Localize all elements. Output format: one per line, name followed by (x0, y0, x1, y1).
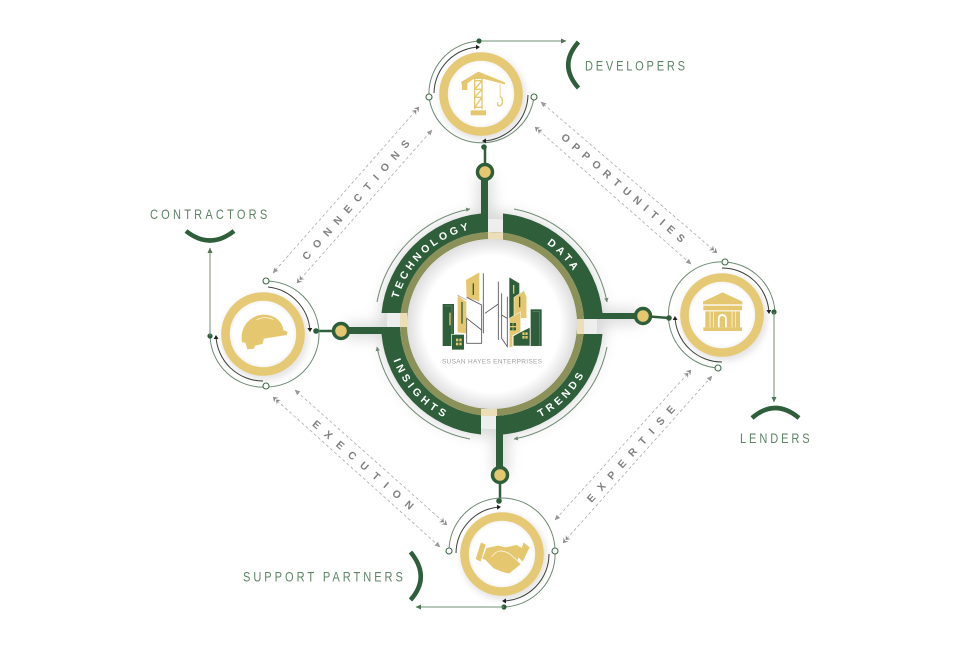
satellite: support partners (446, 498, 558, 610)
gold ring (684, 278, 760, 352)
callout: support partners (243, 552, 504, 607)
satellite: contractors (207, 278, 319, 389)
thin arcs with arrows (377, 209, 607, 439)
logo: Susan Hayes Enterprises (442, 272, 543, 366)
callout: developers: DEVELOPERS (585, 58, 685, 74)
callout: contractors: CONTRACTORS (150, 207, 267, 222)
white centre disc (407, 239, 577, 409)
quadrant: technology (382, 180, 488, 313)
quadrant: insights: INSIGHTS (394, 358, 446, 416)
gold ring (444, 56, 518, 132)
callout: developers (481, 41, 685, 88)
callout: lenders (740, 312, 810, 446)
callout: lenders: LENDERS (740, 431, 810, 446)
dashed link: expertise: EXPERTISE (585, 404, 678, 505)
icon: crane (461, 72, 505, 115)
callout: contractors (150, 207, 267, 336)
dashed link: execution (273, 390, 447, 547)
quadrant: trends: TRENDS (536, 372, 583, 416)
icon: bank (703, 292, 742, 331)
dashed link: execution: EXECUTION (310, 418, 416, 513)
connector: top (478, 147, 492, 180)
dashed link: connections (273, 107, 432, 283)
connector: right (636, 308, 669, 324)
dashed link: expertise (555, 370, 712, 543)
dashed link: opportunities (535, 102, 717, 264)
logo: Susan Hayes Enterprises: SUSAN HAYES ENTERPRISES (442, 358, 543, 366)
dashed link: opportunities: OPPORTUNITIES (558, 131, 687, 245)
icon: handshake (476, 542, 530, 574)
quadrant: data: DATA (547, 238, 578, 270)
hub shadow (345, 176, 640, 475)
quadrant: trends (496, 334, 602, 467)
olive ring (404, 236, 580, 412)
quadrant: insights (349, 327, 481, 434)
dashed link: connections: CONNECTIONS (300, 138, 413, 263)
pale ring segments (400, 232, 584, 416)
gold ring (464, 516, 540, 592)
quadrant: technology: TECHNOLOGY (391, 222, 467, 297)
gold ring (226, 296, 300, 372)
connector: bottom (492, 468, 508, 501)
callout: support partners: SUPPORT PARTNERS (243, 569, 403, 585)
satellite: lenders (666, 259, 777, 371)
icon: hard hat (242, 315, 288, 349)
quadrant: data (503, 214, 634, 319)
connector: left (316, 324, 348, 338)
central hub (346, 176, 640, 474)
satellite: developers (426, 38, 537, 150)
